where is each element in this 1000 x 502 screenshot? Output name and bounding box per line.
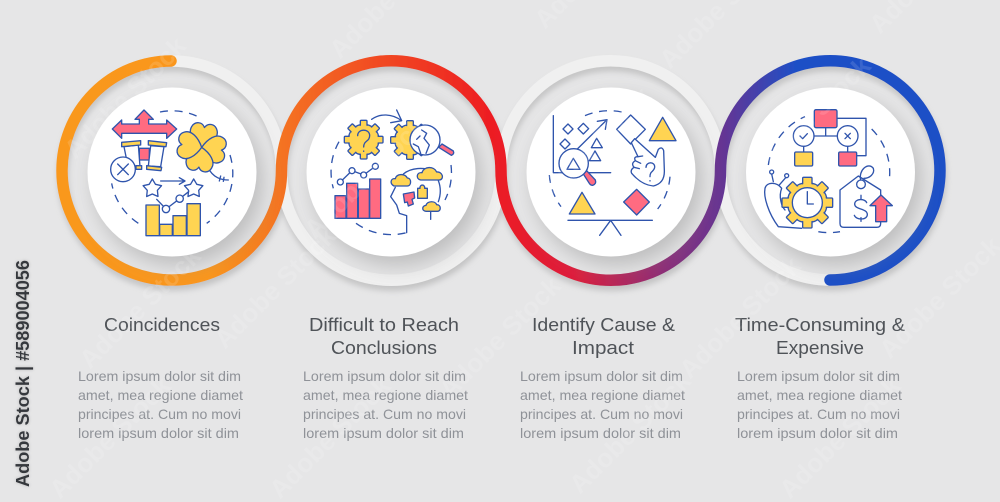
flow chart [793, 110, 866, 166]
clover [176, 122, 228, 181]
head with clouds and puzzle [391, 168, 442, 233]
body text [78, 368, 243, 441]
watermarks: Adobe Stock [208, 220, 342, 354]
watermarks: Adobe Stock [43, 370, 177, 502]
balance scale [568, 189, 652, 235]
watermarks: Adobe Stock [433, 270, 567, 404]
dashed circle [331, 142, 451, 235]
icon: cause and impact [549, 111, 676, 235]
heading: Time-Consuming & [735, 314, 906, 335]
icon: time consuming and expensive [765, 110, 892, 233]
column 3: Identify Cause & Impact [520, 314, 685, 441]
heading: Expensive [776, 337, 864, 358]
heading [309, 314, 459, 358]
body text: principes at. Cum no movi [520, 406, 683, 422]
body text: principes at. Cum no movi [78, 406, 241, 422]
watermarks: Adobe Stock [523, 80, 657, 214]
pink bar chart [335, 163, 381, 218]
light ring segments [172, 61, 830, 280]
icon: coincidences [111, 110, 233, 236]
body text [303, 368, 468, 441]
stock id side text: Adobe Stock | #589004056 [12, 260, 33, 487]
body text: lorem ipsum dolor sit dim [520, 425, 681, 441]
body text [737, 368, 902, 441]
dashed circle [768, 117, 890, 233]
body text: principes at. Cum no movi [303, 406, 466, 422]
body text: Lorem ipsum dolor sit dim [737, 368, 900, 384]
binoculars [111, 141, 167, 182]
heading [735, 314, 906, 358]
snail and gear clock [765, 170, 833, 228]
dashed circle [112, 111, 233, 223]
heading [532, 314, 676, 358]
body text: amet, mea regione diamet [78, 387, 243, 403]
icon: difficult conclusions [331, 110, 454, 235]
heading: Coincidences [104, 314, 220, 335]
body text [520, 368, 685, 441]
watermarks: Adobe Stock [73, 240, 207, 374]
white discs [88, 88, 915, 256]
watermarks: Adobe Stock [58, 30, 192, 164]
serpentine ring [62, 61, 940, 280]
body text: amet, mea regione diamet [303, 387, 468, 403]
body text: Lorem ipsum dolor sit dim [520, 368, 683, 384]
price tag with arrow [840, 166, 892, 227]
column 2: Difficult to Reach Conclusions [303, 314, 468, 441]
stars and bars [143, 178, 203, 236]
crossroads arrow [112, 110, 177, 138]
diamond and triangle with hand [617, 115, 676, 186]
watermarks: Adobe Stock [673, 250, 807, 384]
coloured gradient line [62, 61, 940, 280]
watermarks: Adobe Stock [773, 370, 907, 502]
body text: amet, mea regione diamet [737, 387, 902, 403]
dashed circle [549, 111, 670, 209]
body text: lorem ipsum dolor sit dim [303, 425, 464, 441]
heading: Identify Cause & [532, 314, 676, 335]
watermarks: Adobe Stock [743, 50, 877, 184]
body text: principes at. Cum no movi [737, 406, 900, 422]
heading: Difficult to Reach [309, 314, 459, 335]
watermarks: Adobe Stock [298, 110, 432, 244]
body text: lorem ipsum dolor sit dim [737, 425, 898, 441]
heading: Impact [572, 337, 634, 358]
watermarks: Adobe Stock [263, 370, 397, 502]
body text: Lorem ipsum dolor sit dim [303, 368, 466, 384]
column 1: Coincidences [78, 314, 243, 441]
gear with magnifier [391, 121, 454, 159]
body text: lorem ipsum dolor sit dim [78, 425, 239, 441]
column 4: Time-Consuming & Expensive [735, 314, 906, 441]
body text: amet, mea regione diamet [520, 387, 685, 403]
body text: Lorem ipsum dolor sit dim [78, 368, 241, 384]
arrow arc [372, 110, 402, 123]
scatter chart [553, 116, 611, 185]
gear question [344, 120, 383, 159]
watermarks: Adobe Stock [563, 365, 697, 499]
heading: Conclusions [331, 337, 437, 358]
